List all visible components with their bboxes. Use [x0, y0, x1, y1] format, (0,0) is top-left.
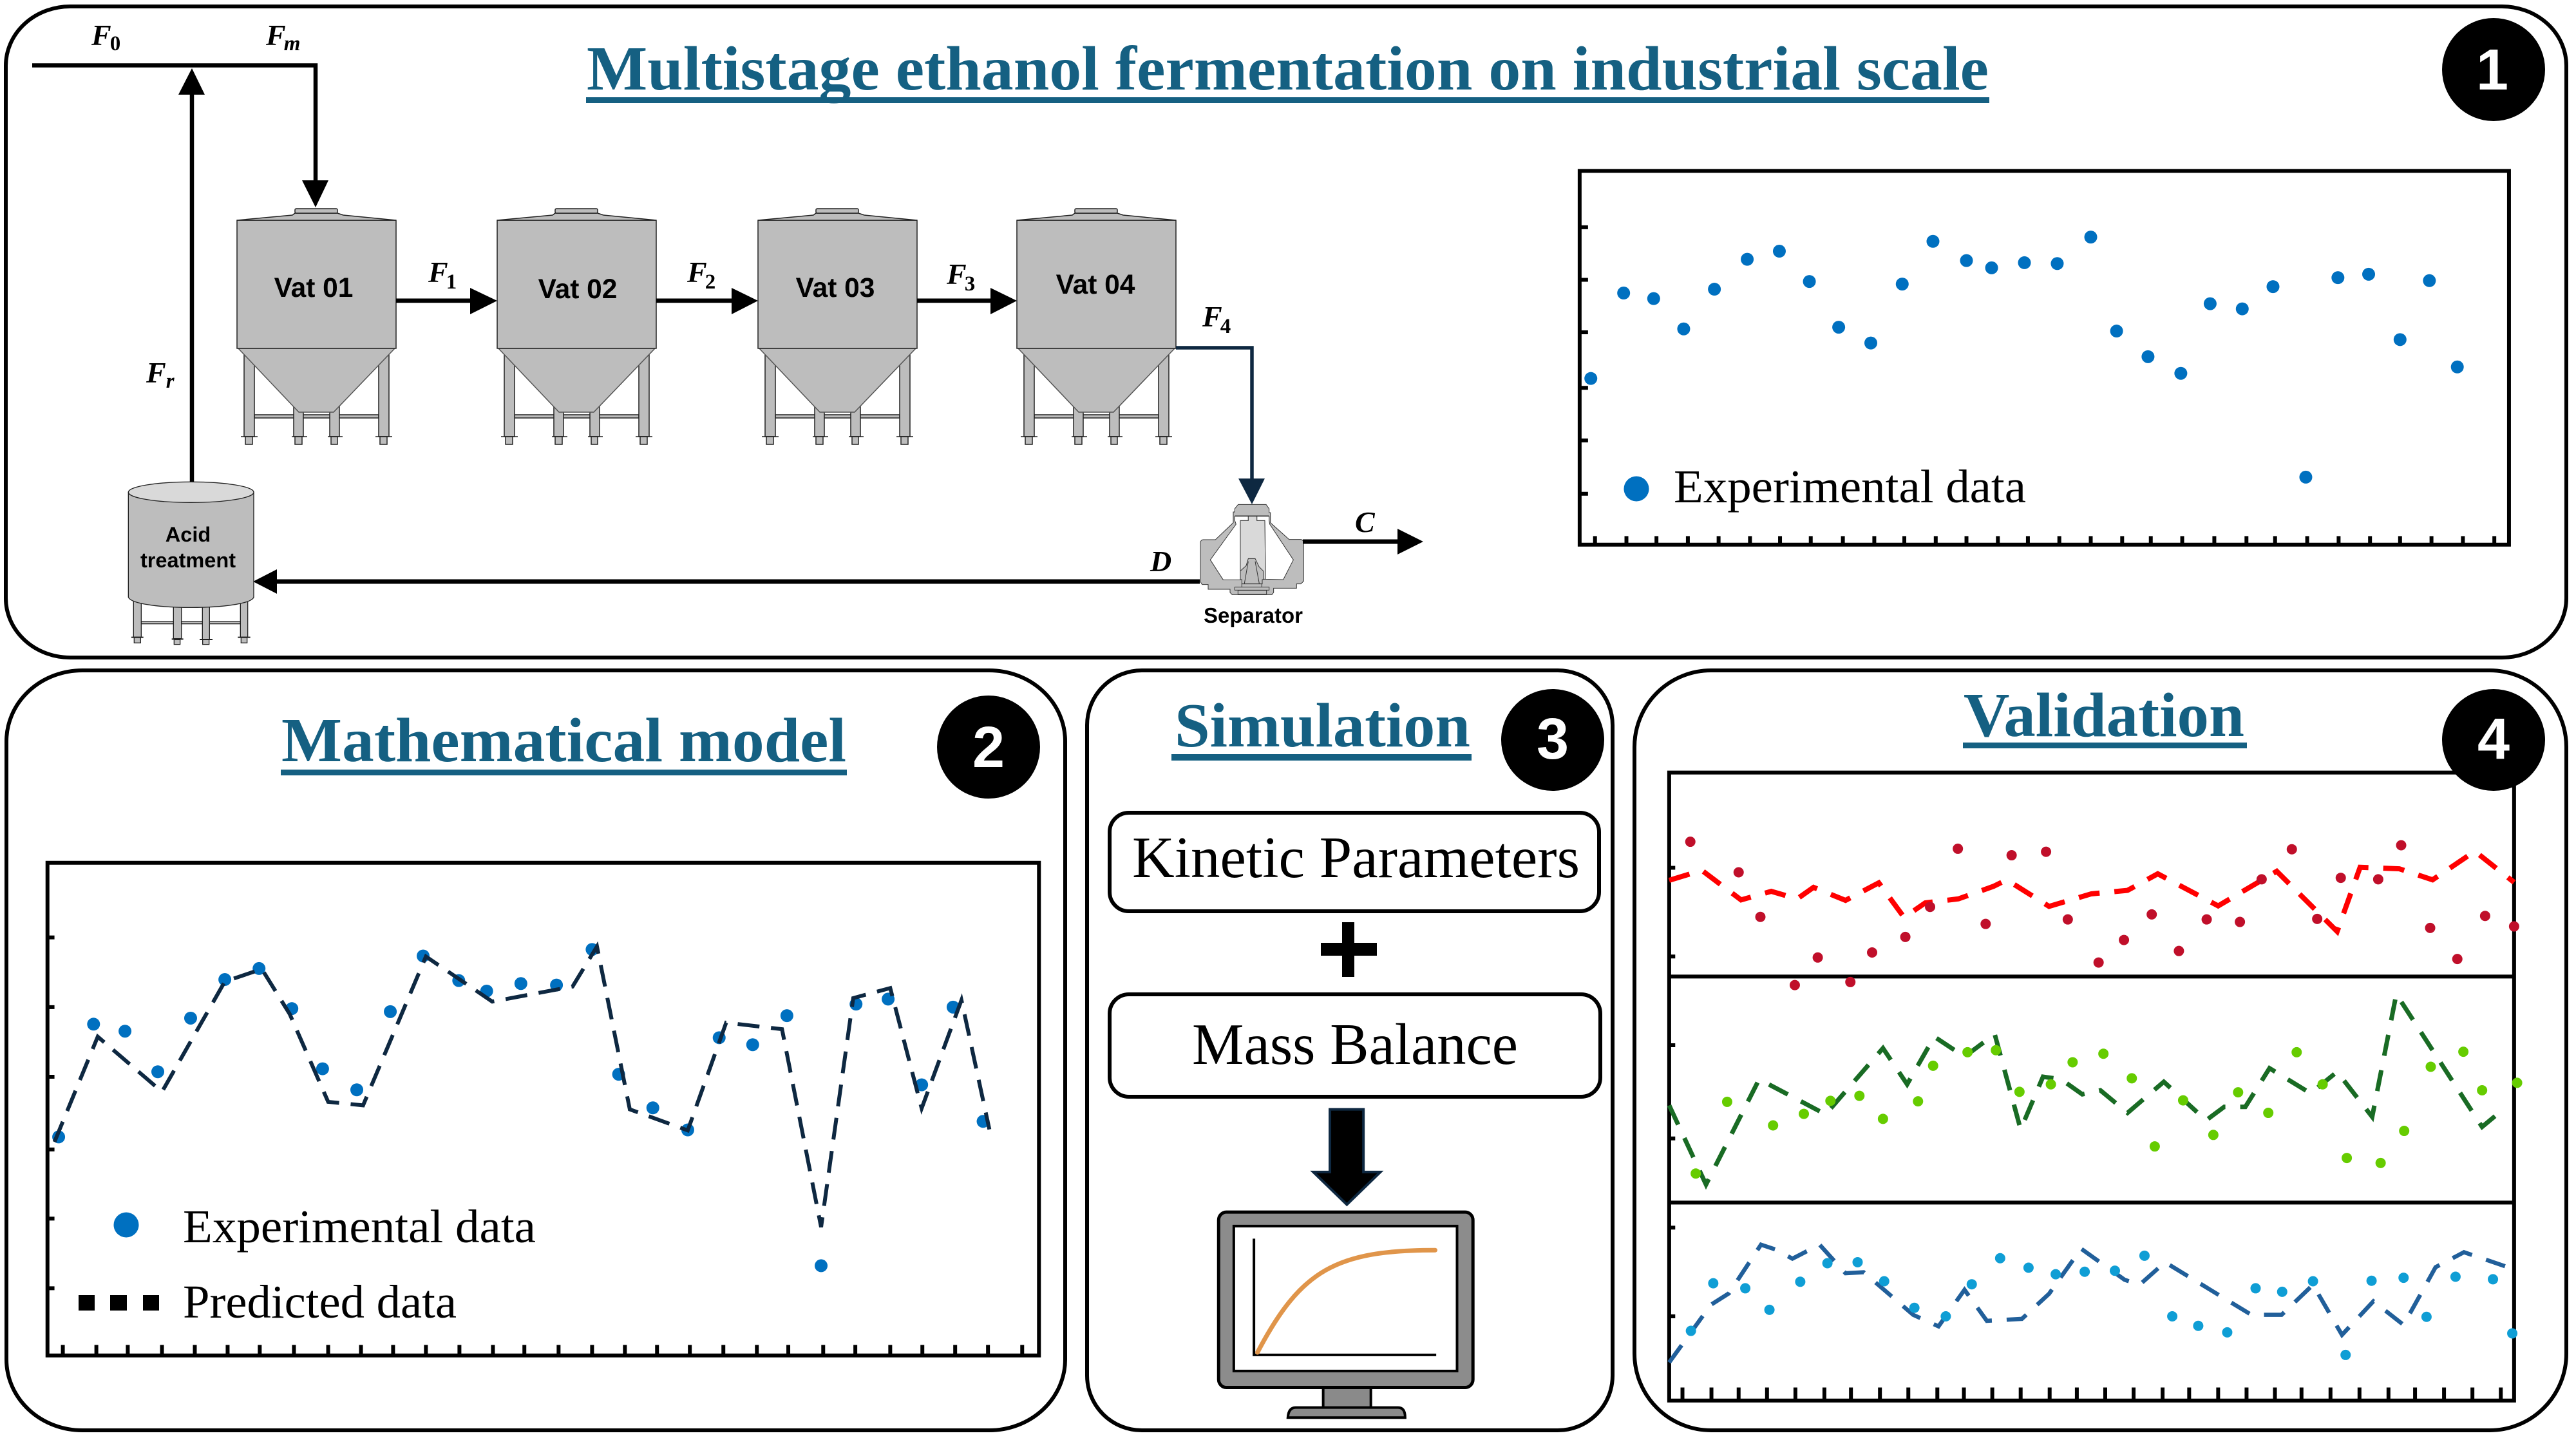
series: blue predicted: [1669, 1245, 2505, 1363]
title: validation: Validation: [1964, 681, 2244, 750]
arrow C output: [1303, 506, 1423, 554]
label F0: 0: [110, 32, 120, 55]
arrow: down to monitor: [1313, 1110, 1380, 1204]
panel 1: multistage fermentation process: [6, 6, 2566, 658]
title: mathematical model: Mathematical model: [281, 706, 846, 775]
badge 1: [2442, 18, 2545, 121]
vat 02: Vat 02: [538, 274, 617, 305]
arrow F2: 2: [705, 270, 715, 294]
arrow F3: 3: [965, 272, 975, 296]
box: mass balance: Mass Balance: [1192, 1012, 1518, 1077]
vat 04: [1017, 209, 1176, 444]
arrow C output: C: [1355, 506, 1376, 538]
vat 03: Vat 03: [796, 273, 875, 303]
arrow D to acid treatment: [253, 545, 1200, 594]
series: blue experimental: [1691, 1256, 2512, 1355]
vat 03: [758, 209, 917, 444]
badge 3: [1501, 689, 1604, 791]
box: kinetic parameters: Kinetic Parameters: [1132, 825, 1580, 890]
arrow F4 to separator: [1176, 300, 1265, 504]
plus sign: [1321, 922, 1377, 977]
series: red predicted: [1669, 851, 2514, 931]
arrow F2: [656, 256, 758, 314]
badge 4: 4: [2477, 707, 2510, 772]
label F0: F: [91, 19, 111, 52]
box: kinetic parameters: [1110, 813, 1599, 911]
chart: experimental data scatter: [1580, 171, 2509, 545]
title: simulation: Simulation: [1175, 691, 1470, 761]
title: multistage ethanol fermentation: Multistage ethanol fermentation on industrial scale: [587, 34, 1989, 104]
arrow: recycle line Fr: [178, 68, 205, 482]
vat 02: [497, 209, 656, 444]
badge 2: 2: [972, 715, 1005, 780]
icon: monitor with growth curve: [1218, 1212, 1473, 1417]
label Fm: F: [266, 19, 286, 52]
vat 04: Vat 04: [1056, 270, 1135, 300]
vat 01: Vat 01: [274, 273, 353, 303]
acid treatment tank: treatment: [140, 549, 236, 572]
label Fm: m: [284, 32, 300, 55]
series: green predicted: [1669, 994, 2506, 1184]
separator: Separator: [1204, 603, 1303, 627]
panel 4: validation: [1634, 670, 2566, 1430]
arrow F1: F: [428, 256, 448, 289]
label Fr: r: [166, 370, 175, 393]
arrow F1: [396, 256, 497, 314]
badge 4: [2442, 689, 2545, 791]
badge 3: 3: [1537, 707, 1569, 772]
series: red experimental: [1690, 842, 2514, 985]
panel 3: simulation: [1087, 670, 1613, 1430]
arrow: feed line F0 Fm into vat 01: [32, 66, 328, 207]
arrow F1: 1: [446, 270, 457, 294]
chart: stacked validation series: [1669, 773, 2517, 1401]
badge 2: [937, 696, 1040, 799]
acid treatment tank: Acid: [166, 523, 211, 546]
box: mass balance: [1110, 994, 1600, 1097]
chart: experimental vs predicted: Predicted data: [183, 1276, 457, 1328]
arrow F2: F: [687, 256, 707, 289]
arrow F4 to separator: 4: [1220, 315, 1231, 338]
separator: [1200, 504, 1303, 627]
vat 01: [237, 209, 396, 444]
arrow F4 to separator: F: [1202, 300, 1222, 333]
chart: experimental data scatter: Experimental data: [1674, 460, 2026, 513]
series: green experimental: [1696, 1050, 2517, 1173]
badge 1: 1: [2476, 38, 2508, 102]
chart: experimental vs predicted: Experimental data: [183, 1200, 536, 1253]
arrow F3: [917, 258, 1017, 314]
panel 2: mathematical model: [6, 670, 1065, 1430]
arrow F3: F: [947, 258, 967, 290]
label Fr: F: [146, 356, 166, 389]
chart: experimental vs predicted: [48, 863, 1039, 1356]
arrow D to acid treatment: D: [1150, 545, 1171, 578]
acid treatment tank: [128, 482, 254, 645]
